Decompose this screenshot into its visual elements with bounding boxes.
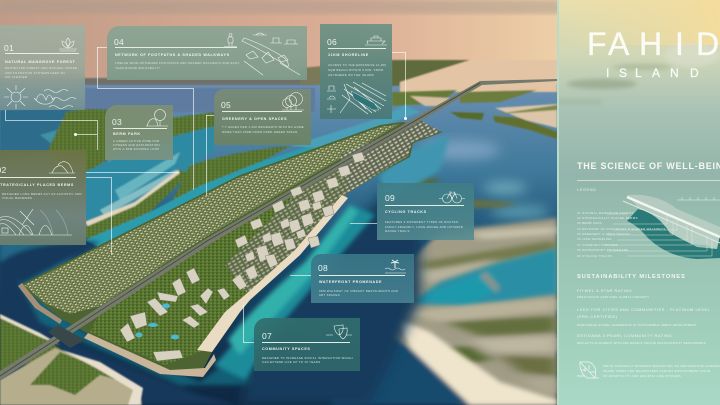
milestone: LEED: [577, 307, 710, 326]
title: GREENERY & OPEN SPACES: [222, 117, 287, 121]
title: NETWORK OF FOOTPATHS & SHADED WALKWAYS: [115, 53, 230, 57]
description: WITH A 5KM RUNNING LOOP: [113, 147, 159, 151]
icon: walker: [224, 33, 237, 47]
description: [328, 63, 386, 77]
legend list: 05 GREENERY & OPEN SPACES: [577, 232, 630, 236]
heading: sustainability milestones: SUSTAINABILITY MILESTONES: [577, 274, 686, 280]
description: ACCESS TO THE EXPANSIVE 11,000: [328, 63, 386, 67]
description: PROTECTED FOREST AND NATURAL INTAKE: [5, 66, 77, 70]
icon: tree and berm: [146, 109, 168, 126]
milestone: Fitwel: PRESTIGIOUS CERTIFIED GLOBAL HUMANITY: [577, 296, 649, 299]
description: ANYWHERE ON THE ISLAND: [328, 73, 374, 77]
title: Fahid Island logo: ISLAND: [606, 66, 699, 80]
panel: 05 greenery and open spaces: [214, 89, 311, 145]
milestone: LEED: WORLDWIDE GLOBAL LEADERSHIP IN SUSTAINABLE URBAN DEVELOPMENT: [577, 324, 697, 326]
number 09: 09: [385, 193, 395, 203]
icon: berm section diagram: [0, 208, 72, 236]
icon: bicycle: [439, 191, 465, 204]
closing statement: [603, 364, 720, 378]
main road and bridge: [0, 79, 557, 380]
description: SQM BEACH WITHIN 5 MIN. FROM: [328, 68, 383, 72]
description: FAMILY-FRIENDLY, LONG-RANGE AND INTIMATE: [385, 225, 463, 229]
upper left water and mangrove: [0, 88, 420, 248]
closing statement: OF HOSPITALITY AND HOLISTIC LIFE SYSTEMS: [603, 374, 681, 378]
panel: 06 11km shoreline: [320, 24, 392, 119]
description: AIR CLEANER: [5, 75, 28, 79]
milestone: Fitwel: [577, 288, 649, 299]
title: CYCLING TRACKS: [385, 210, 427, 214]
icon: boat: [365, 36, 387, 46]
open sea beside the beach: [240, 190, 420, 405]
milestone: LEED: (PRE-CERTIFIED): [577, 314, 618, 319]
description: [262, 356, 353, 364]
description: [113, 139, 160, 151]
title: 11KM SHORELINE: [328, 53, 369, 57]
number 08: 08: [318, 263, 328, 273]
description: 3KM WALKWAY OF VIBRANT RESTAURANTS AND: [319, 289, 398, 293]
icon: island map: [242, 32, 300, 76]
description: DESIGNED TO INCREASE SOCIAL INTERACTION WHICH: [262, 356, 353, 360]
milestone: Estidama: ESTIDAMA 3 PEARL COMMUNITY RATING: [577, 333, 672, 338]
legend list: 06 11KM SHORELINE: [577, 237, 612, 241]
title: Fahid Island logo: FAHID: [587, 26, 719, 62]
icon: berms: [49, 161, 75, 174]
island body: [18, 120, 443, 377]
title: COMMUNITY SPACES: [262, 347, 311, 351]
number 05: 05: [221, 100, 231, 110]
description: 7.7 ACRES PER 1,000 RESIDENTS WITH NO HOME: [222, 125, 304, 129]
description: ART SPACES: [319, 293, 340, 297]
icon: sun, mangrove and waves: [4, 85, 76, 109]
glows on the open water: [420, 140, 550, 218]
panel: 04 network of footpaths: [107, 26, 307, 80]
icon: shoreline map: [327, 82, 386, 114]
milestone: Estidama: [577, 333, 706, 345]
title: BERM PARK: [113, 132, 141, 136]
description: [2, 192, 82, 200]
number 04: 04: [114, 37, 124, 47]
number 01: 01: [4, 43, 14, 53]
description: AND FILTRATION SYSTEMS KEEP AN: [5, 71, 65, 75]
milestone: Estidama: REFLECTS ALIGNMENT WITH ABU DHABI'S UNIQUE SUSTAINABILITY BENCHMARKS: [577, 342, 706, 345]
milestone: Fitwel: FITWEL 3-STAR RATING: [577, 288, 632, 293]
icon: leaf: [577, 362, 599, 378]
closing statement: SHADE TREES AND WALKSCAPES ACROSS ENVIRONMENT ROOM: [603, 368, 710, 372]
description: MORE THAN 250M FROM OPEN GREEN SPACE: [222, 130, 298, 134]
panel: 02 strategically placed berms: [0, 150, 86, 245]
icon: masks: [326, 324, 352, 340]
description: CAN EXTEND LIFE UP TO 15 YEARS: [262, 360, 320, 364]
icon: trees: [282, 92, 304, 110]
sidebar background: [557, 0, 720, 405]
description: [115, 61, 240, 70]
panel: 08 waterfront promenade: [311, 254, 414, 303]
icon: lotus: [59, 38, 77, 52]
icon: palm and waves: [385, 260, 406, 274]
description: DESIGNED LONG BERMS ACT AS ACOUSTIC AND: [2, 192, 82, 196]
description: [222, 125, 304, 134]
legend list: 03 BERM PARK: [577, 221, 602, 225]
number 07: 07: [262, 331, 272, 341]
legend island graphic: [602, 194, 720, 259]
legend label: LEGEND: [577, 187, 596, 192]
title: WATERFRONT PROMENADE: [319, 280, 382, 284]
description: [319, 289, 398, 297]
hotels and apartment blocks: [120, 152, 365, 361]
description: RANGE TRAILS: [385, 229, 410, 233]
number 03: 03: [112, 117, 122, 127]
legend list: 02 STRATEGICALLY PLACED BERMS: [577, 216, 638, 220]
resort pools: [136, 304, 179, 340]
panel: 03 berm park: [105, 105, 173, 160]
bottom-left mainland: [0, 314, 143, 405]
number 06: 06: [327, 37, 337, 47]
description: FEATURES 3 DIFFERENT TYPES OF ROUTES:: [385, 220, 459, 224]
closing statement: WE'VE CAREFULLY BLENDED INNOVATION, EV RESTORATIVE GARDENS,: [603, 364, 720, 368]
sidebar content: [577, 26, 720, 378]
description: FITNESS AND EXPLORATION: [113, 143, 160, 147]
legend list: 09 CYCLING TRACKS: [577, 254, 612, 258]
title: NATURAL MANGROVE FOREST: [5, 60, 75, 64]
title: Fahid Island logo: [587, 26, 719, 80]
description: TWELVE WIND-OPTIMIZED FOOTPATHS AND SHADED WALKWAYS FOR EASY,: [115, 61, 240, 65]
legend list: 01 NATURAL MANGROVE FOREST: [577, 210, 633, 214]
milestone: LEED: LEED FOR CITIES AND COMMUNITIES - PLATINUM LEVEL: [577, 307, 710, 312]
description: A GREEN ACTIVE ZONE FOR: [113, 139, 159, 143]
panel: 09 cycling tracks: [377, 183, 474, 240]
description: [5, 66, 77, 79]
legend list: [577, 210, 666, 258]
description: YEAR-ROUND WALKABILITY: [115, 66, 161, 70]
blurred foreground land at right: [372, 177, 557, 405]
far shore and distant water: [0, 60, 557, 139]
panel: 01 natural mangrove forest: [0, 25, 85, 110]
legend list: 08 WATERFRONT PROMENADE: [577, 248, 629, 252]
legend list: 04 NETWORK OF FOOTPATHS & SHADED WALKWAYS: [577, 227, 666, 231]
panel: 07 community spaces: [254, 318, 360, 371]
description: VISUAL BARRIERS: [2, 196, 32, 200]
description: [385, 220, 463, 233]
legend list: 07 COMMUNITY SPACES: [577, 243, 618, 247]
